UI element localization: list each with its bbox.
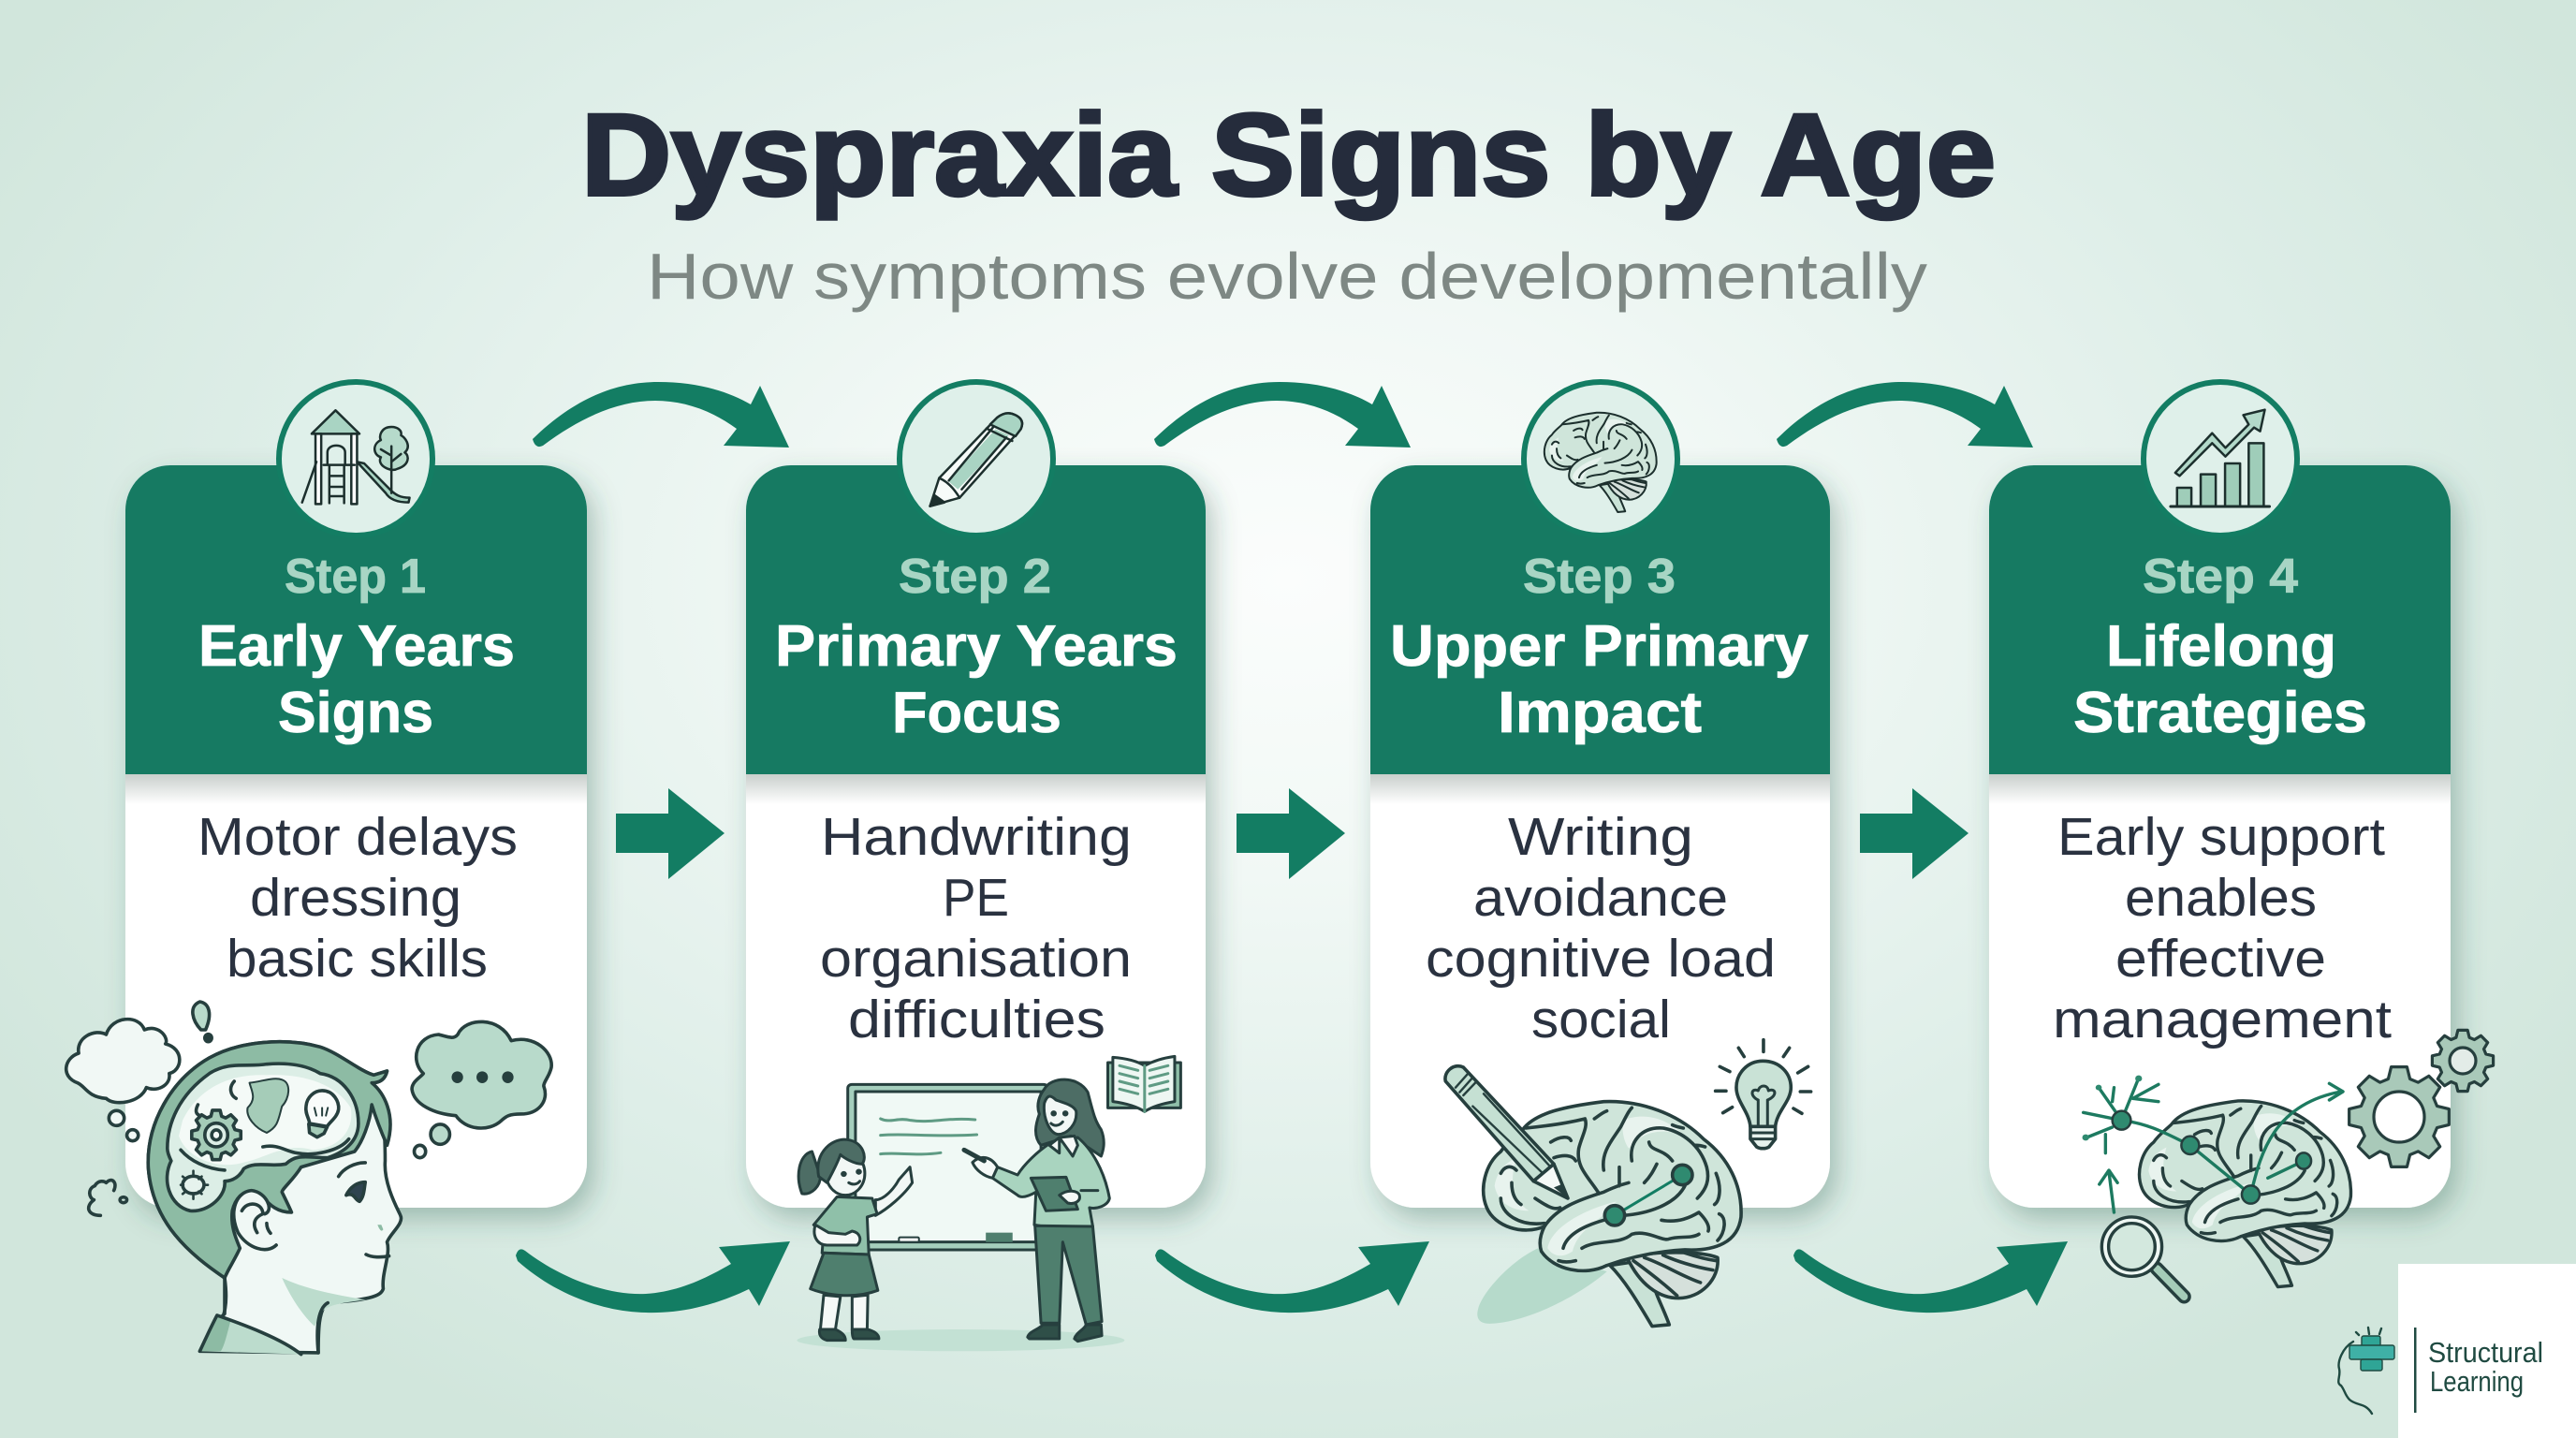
body text: PE <box>943 868 1009 928</box>
heading: Lifelong <box>2106 614 2336 679</box>
step label: Step 4 <box>2143 550 2298 604</box>
brain <box>1484 1102 1741 1327</box>
heading: Strategies <box>2073 681 2367 745</box>
body text <box>198 807 518 989</box>
illustration: brain with neuron, gears and magnifier <box>2083 1030 2494 1297</box>
hair <box>148 1042 390 1278</box>
curved arrow: step 2 to 3 bottom <box>1155 1241 1429 1313</box>
face and neck <box>148 1042 402 1353</box>
heading <box>198 614 515 745</box>
heading <box>775 614 1178 745</box>
body text: organisation <box>820 929 1132 989</box>
body text: effective <box>2115 929 2326 989</box>
illustration: child head with thoughts <box>66 1002 551 1355</box>
body text: management <box>2053 990 2392 1049</box>
body text <box>820 807 1132 1049</box>
body text: avoidance <box>1473 868 1728 928</box>
body text <box>2053 807 2392 1049</box>
curved arrow: step 3 to 4 top <box>1777 382 2033 448</box>
neck shade <box>282 1278 366 1327</box>
heading: Impact <box>1498 681 1702 745</box>
illustration: teacher and child at whiteboard <box>797 1056 1180 1351</box>
step label: Step 3 <box>1523 550 1676 604</box>
icon: brain <box>1524 382 1677 536</box>
ear <box>234 1191 276 1250</box>
illustration: brain with pencil and lightbulb <box>1445 1040 1811 1327</box>
magnifier <box>2101 1217 2184 1297</box>
heading: Focus <box>892 681 1061 745</box>
step label: Step 1 <box>285 550 426 604</box>
heading <box>1390 614 1809 745</box>
logo divider <box>2414 1328 2417 1413</box>
logo text <box>2428 1336 2543 1398</box>
panel: step 1 <box>125 382 587 1208</box>
curved arrow: step 3 to 4 bottom <box>1793 1241 2068 1313</box>
heading: Early Years <box>198 614 515 679</box>
body text: Motor delays <box>198 807 518 867</box>
logo: structural learning <box>2338 1328 2543 1414</box>
logo text: Structural <box>2428 1336 2543 1369</box>
body text: difficulties <box>848 990 1105 1049</box>
girl <box>798 1139 913 1341</box>
icon: pencil <box>900 382 1053 536</box>
body text: Handwriting <box>821 807 1132 867</box>
body text: Writing <box>1508 807 1693 867</box>
body text <box>1426 807 1776 1049</box>
icon: open book <box>1108 1056 1180 1111</box>
logo text: Learning <box>2430 1365 2524 1398</box>
whiteboard <box>848 1084 1047 1250</box>
body text: basic skills <box>227 929 488 989</box>
body text: cognitive load <box>1426 929 1776 989</box>
gear large <box>2349 1030 2494 1167</box>
logo mark <box>2338 1328 2394 1414</box>
body text: Early support <box>2057 807 2385 867</box>
heading: Signs <box>278 681 433 745</box>
curved arrow: step 1 to 2 top <box>533 382 789 448</box>
heading: Primary Years <box>775 614 1178 679</box>
shadow <box>1477 1248 1607 1324</box>
heading: Upper Primary <box>1390 614 1809 679</box>
brain <box>2140 1101 2350 1287</box>
subtitle: How symptoms evolve developmentally <box>647 240 1927 313</box>
face features <box>339 1163 389 1257</box>
logo box <box>2398 1264 2576 1438</box>
body text: enables <box>2125 868 2317 928</box>
body text: dressing <box>250 868 461 928</box>
panel: step 3 <box>1370 382 1830 1208</box>
neural pathways <box>2084 1078 2343 1212</box>
step label: Step 2 <box>899 550 1051 604</box>
pencil <box>1445 1066 1568 1198</box>
arrow: step 3 to 4 middle <box>1860 788 1969 879</box>
title: Dyspraxia Signs by Age <box>581 91 1996 220</box>
network nodes <box>1604 1165 1692 1225</box>
icon: lightbulb <box>1716 1040 1811 1149</box>
panel: step 4 <box>1989 382 2451 1208</box>
icon: playground <box>279 382 432 536</box>
teacher <box>964 1079 1109 1342</box>
ground shadow <box>797 1329 1124 1351</box>
arrow: step 1 to 2 middle <box>616 788 724 879</box>
brain in head <box>168 1064 359 1211</box>
arrow: step 2 to 3 middle <box>1237 788 1345 879</box>
curved arrow: step 2 to 3 top <box>1154 382 1411 448</box>
panel: step 2 <box>746 382 1206 1208</box>
body text: social <box>1531 990 1671 1049</box>
shirt <box>199 1315 301 1355</box>
curved arrow: step 1 to 2 bottom <box>516 1241 790 1313</box>
icon: growth chart <box>2144 382 2297 536</box>
heading <box>2073 614 2367 745</box>
